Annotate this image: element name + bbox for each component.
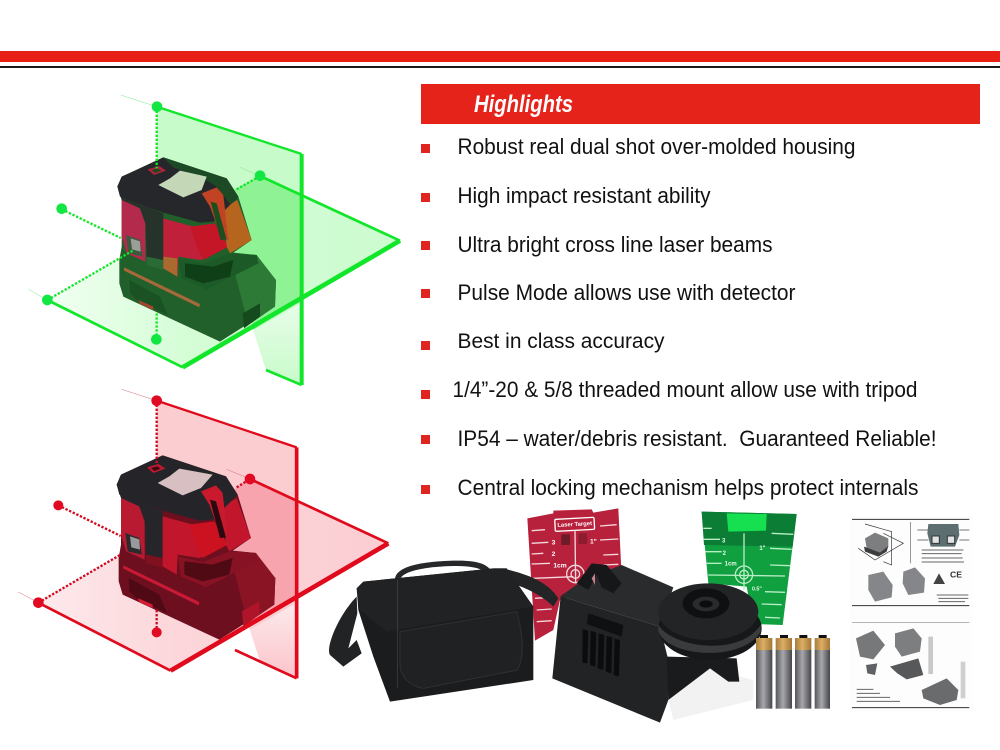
bullet 8: Central locking mechanism helps protect internals [458, 475, 918, 500]
green laser level body [117, 157, 276, 342]
green laser dots [42, 101, 265, 345]
green horizontal laser plane [28, 154, 400, 385]
manual illustrations: CE [950, 569, 962, 579]
green laser target plate: 3 [722, 539, 726, 545]
bullet 2: High impact resistant ability [458, 183, 710, 208]
red laser target plate: 1" [590, 538, 597, 545]
bullet 5: Best in class accuracy [458, 330, 665, 353]
red vertical laser plane [122, 389, 297, 678]
bullet 7: IP54 – water/debris resistant. Guaranteed Reliable! [458, 426, 936, 451]
bullet 6: 1/4”-20 & 5/8 threaded mount allow use with tripod [452, 377, 918, 402]
manual text lines [857, 550, 968, 701]
carrying bag [329, 561, 558, 702]
bullet 3: Ultra bright cross line laser beams [458, 232, 772, 257]
manual illustrations [856, 524, 965, 705]
red laser target plate: Laser Target [557, 521, 592, 529]
green laser target plate: 1cm [725, 562, 737, 568]
instruction manual thumbnail [849, 516, 973, 713]
diagram: red laser level [18, 389, 388, 678]
bullet 4: Pulse Mode allows use with detector [458, 280, 796, 305]
red laser target plate [527, 508, 622, 641]
top banner stripes [0, 51, 1000, 68]
green vertical laser plane [121, 95, 302, 385]
panel: highlights heading [421, 84, 980, 124]
red dotted laser beams [38, 401, 250, 632]
diagram: green laser level [28, 95, 400, 385]
highlight list [421, 134, 936, 500]
green dotted laser beams [47, 107, 260, 339]
red laser target plate: 1cm [553, 562, 567, 569]
green laser target plate [702, 512, 797, 625]
tripod mount adapter [552, 563, 762, 723]
accessories group [329, 508, 830, 723]
green laser target plate: 0.5" [752, 587, 762, 593]
green laser target plate: 1" [759, 546, 766, 552]
green laser target plate: 2 [723, 551, 727, 557]
bullet 1: Robust real dual shot over-molded housing [458, 134, 856, 159]
red laser target plate: 2 [552, 551, 556, 558]
panel: highlights heading: Highlights [474, 91, 573, 118]
red laser target plate: 3 [552, 539, 556, 546]
red laser level body [117, 455, 275, 640]
red horizontal laser plane [18, 447, 388, 678]
red laser dots [33, 395, 255, 637]
batteries [756, 635, 830, 709]
